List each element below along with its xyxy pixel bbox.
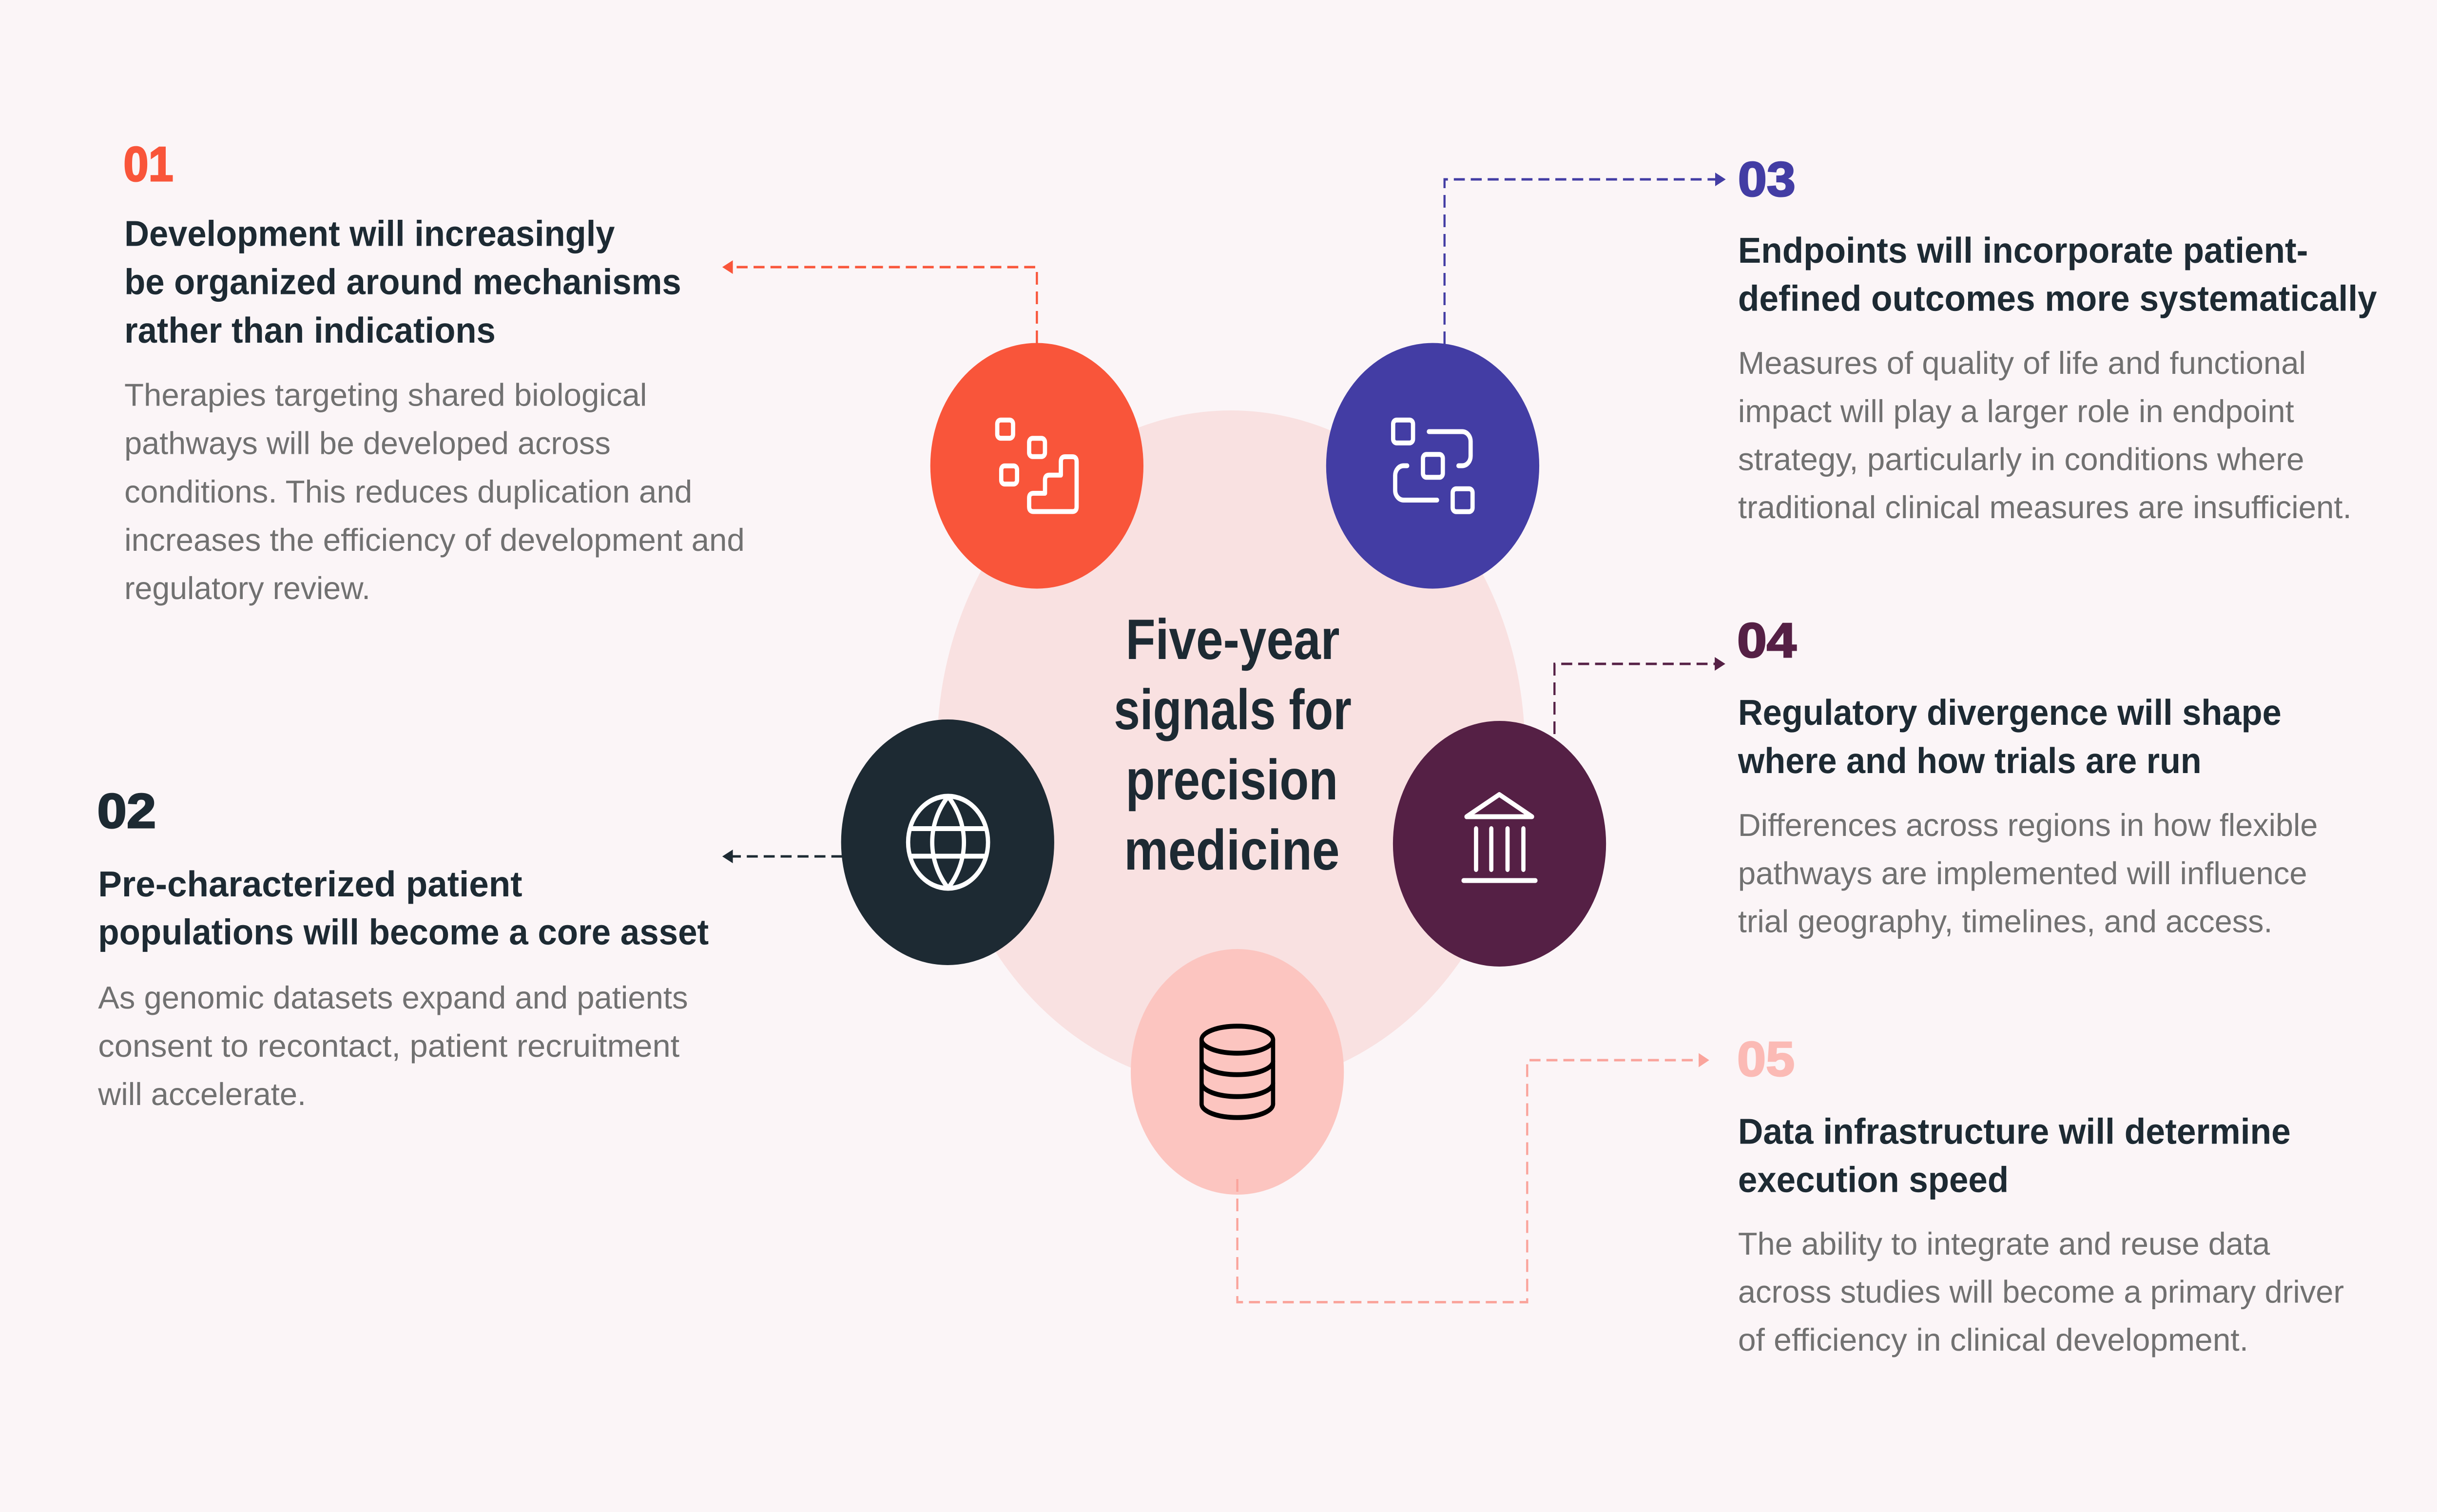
body 03: strategy, particularly in conditions where	[1738, 442, 2304, 477]
body 02: consent to recontact, patient recruitment	[98, 1028, 679, 1064]
heading 01: be organized around mechanisms	[124, 261, 681, 302]
heading 02: populations will become a core asset	[98, 911, 709, 952]
central background circle	[937, 410, 1525, 1088]
text block: 01	[123, 137, 745, 606]
title: precision	[1126, 748, 1338, 812]
icon circle: 03 indigo workflow	[1326, 343, 1539, 589]
heading 03	[1738, 230, 2377, 319]
heading 04: Regulatory divergence will shape	[1738, 692, 2282, 733]
text block: 05	[1737, 1032, 2344, 1357]
body 03: Measures of quality of life and functional	[1738, 345, 2306, 381]
body 01	[124, 377, 745, 606]
number 01: 01	[123, 137, 174, 192]
arrow: connector 03	[1445, 173, 1726, 344]
icon circle: 01 orange stairs	[930, 343, 1143, 589]
icon: database	[1201, 1026, 1273, 1118]
body 04: pathways are implemented will influence	[1738, 855, 2307, 891]
icon: institution building	[1464, 795, 1535, 880]
arrow: connector 04	[1554, 657, 1725, 734]
arrow: connector 05	[1238, 1053, 1709, 1302]
arrow: connector 01	[722, 260, 1037, 343]
body 04: trial geography, timelines, and access.	[1738, 904, 2273, 939]
heading 04: where and how trials are run	[1738, 740, 2202, 781]
icon: connected squares	[1393, 420, 1472, 512]
heading 05	[1738, 1111, 2291, 1200]
title	[1114, 607, 1352, 882]
icon: squares and stairs	[997, 420, 1077, 512]
body 01: Therapies targeting shared biological	[124, 377, 647, 412]
body 02: As genomic datasets expand and patients	[98, 980, 688, 1015]
body 02: will accelerate.	[97, 1076, 306, 1112]
icon circle: 02 dark globe	[841, 719, 1054, 965]
icon circle: 05 pink database	[1131, 949, 1344, 1195]
text block: 03	[1738, 152, 2377, 525]
icon: globe	[908, 796, 988, 888]
body 03: impact will play a larger role in endpoint	[1738, 393, 2294, 429]
body 05: across studies will become a primary driver	[1738, 1274, 2344, 1310]
text block: 02	[97, 784, 709, 1112]
body 01: conditions. This reduces duplication and	[124, 474, 692, 509]
body 05: of efficiency in clinical development.	[1738, 1322, 2248, 1357]
heading 05: execution speed	[1738, 1159, 2009, 1200]
heading 05: Data infrastructure will determine	[1738, 1111, 2291, 1152]
heading 02	[98, 864, 709, 952]
body 01: increases the efficiency of development and	[124, 522, 745, 558]
heading 01: rather than indications	[124, 310, 496, 350]
number 03: 03	[1738, 152, 1796, 207]
body 01: regulatory review.	[124, 570, 370, 606]
heading 03: Endpoints will incorporate patient-	[1738, 230, 2308, 271]
body 05	[1738, 1226, 2344, 1357]
arrow: connector 02	[722, 850, 842, 863]
number 02: 02	[97, 784, 156, 838]
body 04	[1738, 807, 2318, 939]
heading 04	[1738, 692, 2282, 781]
body 04: Differences across regions in how flexible	[1738, 807, 2318, 843]
number 04: 04	[1737, 613, 1797, 668]
icon circle: 04 plum institution	[1393, 721, 1606, 967]
heading 01	[124, 213, 681, 350]
body 01: pathways will be developed across	[124, 425, 611, 461]
heading 03: defined outcomes more systematically	[1738, 278, 2377, 319]
body 03	[1738, 345, 2352, 525]
heading 01: Development will increasingly	[124, 213, 615, 253]
heading 02: Pre-characterized patient	[98, 864, 522, 904]
title: Five-year	[1126, 607, 1340, 671]
body 02	[97, 980, 688, 1112]
number 05: 05	[1737, 1032, 1795, 1086]
title: medicine	[1124, 818, 1340, 882]
body 05: The ability to integrate and reuse data	[1738, 1226, 2270, 1261]
title: signals for	[1114, 678, 1352, 741]
text block: 04	[1737, 613, 2318, 939]
body 03: traditional clinical measures are insufficient.	[1738, 489, 2352, 525]
